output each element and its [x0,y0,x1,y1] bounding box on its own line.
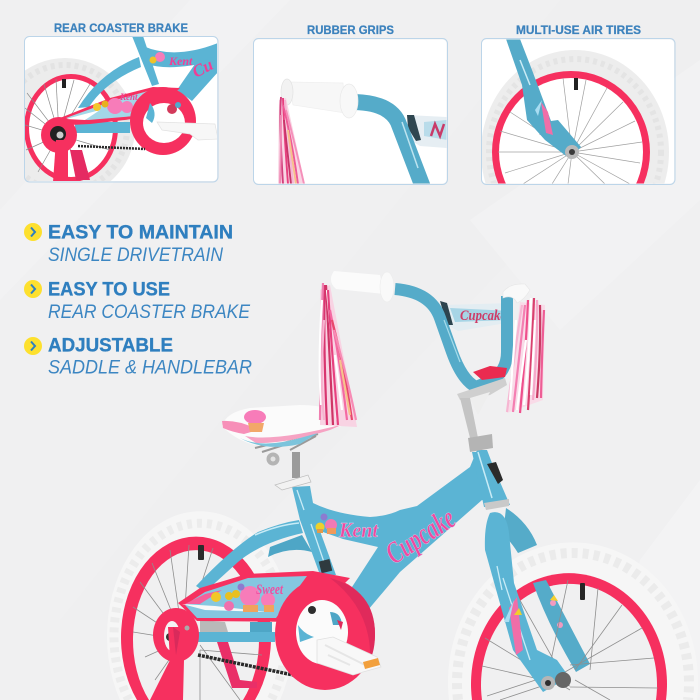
left tassel [320,283,357,427]
rear stay and drivetrain [197,620,293,688]
panel: multi-use air tires [481,25,676,185]
photo: rear wheel close-up: Cu [189,55,216,82]
front wheel [448,542,698,700]
guard sticker: cupcakes [211,584,275,612]
handlebar [331,271,530,452]
right tassel [507,298,545,413]
feature: easy to use [24,280,250,323]
photo: rear wheel close-up [25,37,217,181]
main bicycle illustration [107,271,698,700]
frame sticker: cupcakes [316,514,337,534]
frame label: Kent: Kent [338,518,379,542]
bullet icon [24,223,42,241]
feature title: EASY TO USE [48,280,170,300]
panel frame [24,36,218,182]
feature subtitle: REAR COASTER BRAKE [48,302,250,323]
guard label: Sweet: Sweet [256,582,284,598]
chain guard [178,571,350,622]
panel: rubber grips [253,23,448,190]
saddle [222,405,348,447]
feature subtitle: SINGLE DRIVETRAIN [48,245,223,266]
feature list [24,222,252,378]
chainring cover [275,578,375,690]
photo: rear wheel close-up: Kent [168,54,193,68]
heading: rear coaster brake: REAR COASTER BRAKE [54,21,188,35]
panel: rear coaster brake [24,23,218,182]
panel frame [254,38,448,184]
handlebar: Cupcake [460,308,506,324]
rear wheel [107,511,293,700]
frame label: Cupcake: Cupcake [379,500,462,571]
fork rear blade upper [503,508,537,553]
feature subtitle: SADDLE & HANDLEBAR [48,358,252,378]
front fork [485,512,571,692]
heading: rubber grips: RUBBER GRIPS [307,23,394,37]
feature title: EASY TO MAINTAIN [48,222,233,244]
seat post and clamp [255,434,318,490]
bike frame [196,450,508,610]
feature: easy to maintain [24,222,233,266]
feature: adjustable [24,336,252,378]
panel frame [482,38,675,184]
head tube details [472,452,510,510]
bullet icon [24,280,42,298]
bullet icon [24,337,42,355]
pedal [317,637,381,675]
heading: multi-use air tires: MULTI-USE AIR TIRES [516,23,641,37]
feature title: ADJUSTABLE [48,336,173,356]
photo: rear wheel close-up: Kent [119,92,138,102]
saddle cupcake [244,410,266,432]
photo: front wheel close-up [482,40,674,184]
rear hub guard and arm [150,608,199,700]
photo: handlebar grip close-up [253,38,448,190]
